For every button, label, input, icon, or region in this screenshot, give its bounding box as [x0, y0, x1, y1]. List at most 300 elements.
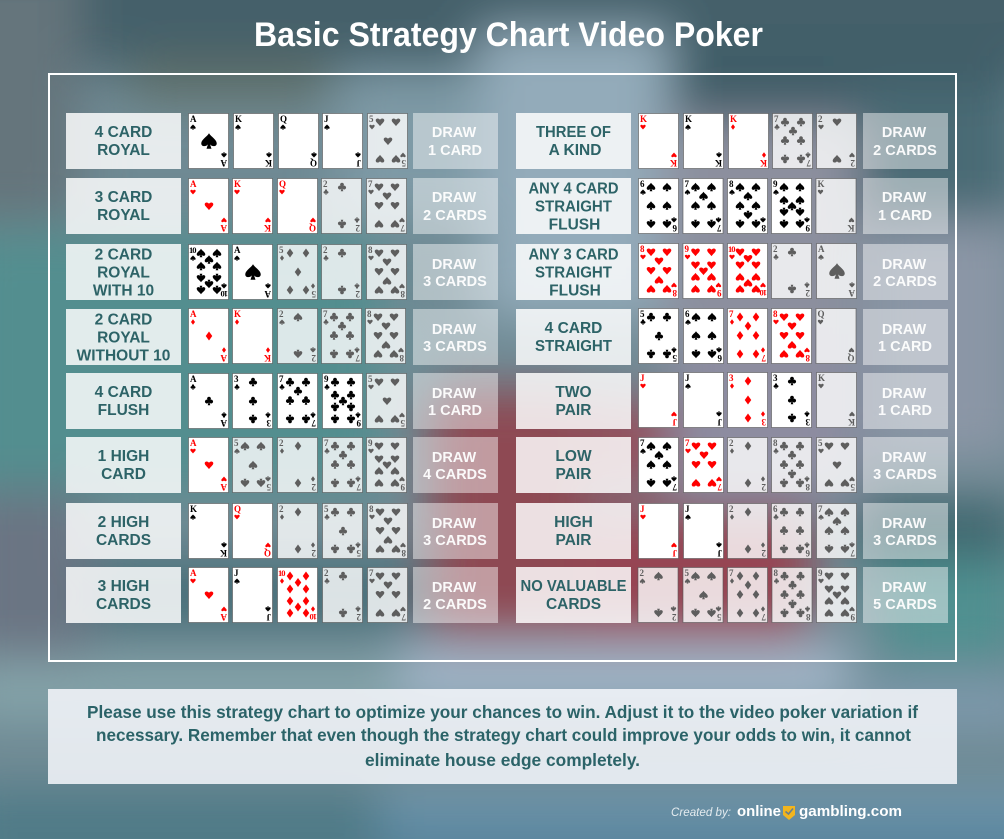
row: 4 card royal — [66, 113, 498, 169]
card: A clubs: A — [190, 374, 197, 384]
card: J spades: J — [266, 612, 271, 622]
row: 2 card royal without 10 — [66, 308, 498, 365]
row: any 3 card straight flush: STRAIGHT — [535, 264, 613, 282]
card: 5 spades faded: 5 — [684, 568, 690, 578]
row: low pair: 3 CARDS — [873, 467, 937, 483]
card: 3 diamonds — [728, 372, 768, 428]
card: 7 spades faded: 7 — [850, 548, 855, 558]
card: J hearts — [638, 372, 678, 428]
row: two pair — [516, 372, 948, 429]
card: A diamonds — [188, 308, 228, 364]
row: no valuable cards: DRAW — [882, 580, 926, 596]
card: 5 clubs faded: 5 — [324, 504, 329, 514]
card: K diamonds — [232, 308, 272, 364]
card: 2 spades faded: 2 — [311, 353, 316, 363]
card: 8 hearts: 8 — [805, 353, 810, 363]
card: 7 clubs faded: 7 — [806, 158, 811, 168]
card: 8 clubs faded: 8 — [773, 438, 778, 448]
card: A spades: A — [220, 158, 227, 168]
card: J spades: J — [717, 417, 722, 427]
card: 5 spades faded — [232, 438, 272, 492]
row: any 4 card straight flush: 1 CARD — [878, 208, 932, 224]
card: A spades: A — [264, 289, 271, 299]
row: 2 high cards: DRAW — [432, 516, 476, 532]
row: 2 card royal with 10: 3 CARDS — [423, 274, 487, 290]
card: 7 diamonds: 7 — [761, 353, 766, 363]
row: 4 card flush: FLUSH — [98, 402, 149, 419]
card: 6 spades: 6 — [717, 353, 722, 363]
card: 7 clubs faded: 7 — [356, 482, 361, 492]
card: 2 clubs faded: 2 — [323, 245, 328, 255]
card: 6 spades: 6 — [640, 179, 645, 189]
card: K hearts faded — [816, 178, 856, 234]
card: Q hearts — [232, 504, 272, 558]
card: A hearts — [188, 178, 228, 234]
card: Q hearts faded: Q — [847, 353, 854, 363]
card: 2 diamonds faded: 2 — [311, 548, 316, 558]
card: 3 clubs — [772, 372, 812, 428]
row: any 4 card straight flush: ANY 4 CARD — [528, 180, 618, 198]
card: 2 spades faded: 2 — [279, 309, 284, 319]
card: 2 diamonds faded: 2 — [761, 482, 766, 492]
card: K diamonds: K — [730, 114, 737, 124]
card: 10 spades — [188, 244, 228, 300]
card: J spades — [684, 504, 724, 558]
card: K spades — [234, 114, 274, 168]
card: K hearts faded: K — [847, 223, 854, 233]
card: 7 clubs faded — [322, 308, 362, 364]
card: 8 clubs faded: 8 — [774, 568, 778, 578]
chart frame — [49, 74, 956, 661]
card: 2 clubs faded: 2 — [355, 223, 360, 233]
card: 7 diamonds faded: 7 — [729, 568, 734, 578]
card: 8 hearts: 8 — [640, 244, 645, 254]
row: 4 card straight: 4 CARD — [545, 320, 602, 337]
card: 2 spades faded: 2 — [672, 612, 676, 622]
row: three of a kind: THREE OF — [536, 124, 611, 141]
card: 9 spades: 9 — [773, 179, 778, 189]
card: 3 clubs: 3 — [266, 418, 271, 428]
row: 2 high cards: 2 HIGH — [98, 514, 149, 531]
card: 8 hearts faded — [366, 244, 406, 300]
card: K spades: K — [265, 158, 272, 168]
card: K hearts: K — [670, 158, 677, 168]
card: 7 hearts: 7 — [717, 482, 722, 492]
row: any 4 card straight flush — [516, 178, 948, 234]
row: any 4 card straight flush: STRAIGHT — [535, 198, 613, 216]
card: 7 diamonds: 7 — [729, 309, 734, 319]
card: K spades — [188, 504, 228, 558]
card: 8 spades: 8 — [761, 223, 766, 233]
card: 7 diamonds — [728, 308, 768, 364]
card: A hearts: A — [220, 482, 227, 492]
card: A spades: A — [190, 114, 197, 124]
row: three of a kind — [516, 113, 948, 169]
note panel: necessary. Remember that even though the strategy chart could improve your odds to win, it cannot — [96, 725, 911, 745]
card: K hearts faded: K — [848, 417, 855, 427]
card: 7 spades: 7 — [716, 223, 722, 233]
card: 8 hearts faded: 8 — [399, 353, 404, 363]
card: Q hearts: Q — [309, 223, 316, 233]
title: Basic Strategy Chart Video Poker — [254, 16, 763, 54]
card: 3 clubs: 3 — [234, 374, 239, 384]
row: 2 high cards: 3 CARDS — [423, 533, 487, 549]
card: 10 diamonds: 10 — [278, 568, 285, 578]
card: K spades: K — [685, 114, 692, 124]
card: J spades: J — [234, 568, 239, 578]
card: 7 clubs faded: 7 — [323, 309, 328, 319]
card: 7 spades faded — [816, 504, 856, 558]
card: 6 spades: 6 — [672, 223, 677, 233]
card: 5 spades faded: 5 — [266, 482, 271, 492]
row: low pair: LOW — [555, 448, 592, 465]
card: 5 clubs faded — [322, 504, 362, 558]
card: 10 spades: 10 — [189, 245, 196, 255]
row: 3 high cards: 3 HIGH — [98, 578, 149, 595]
card: 9 hearts — [683, 244, 723, 298]
card: 2 spades faded — [278, 308, 318, 364]
row: 4 card royal: ROYAL — [97, 142, 150, 159]
card: 6 spades: 6 — [685, 309, 690, 319]
note panel: eliminate house edge completely. — [365, 750, 640, 770]
card: 8 hearts: 8 — [773, 309, 778, 319]
card: K hearts: K — [640, 114, 647, 124]
row: 2 card royal without 10: WITHOUT 10 — [77, 348, 170, 364]
row: 4 card straight: STRAIGHT — [535, 338, 613, 355]
card: K diamonds: K — [234, 309, 241, 319]
card: 9 hearts faded: 9 — [400, 482, 405, 492]
card: A spades faded: A — [818, 244, 825, 254]
card: 2 diamonds faded — [278, 504, 318, 558]
card: 9 hearts: 9 — [684, 244, 690, 254]
card: 8 spades — [728, 178, 768, 234]
card: 10 diamonds — [278, 568, 318, 622]
card: 2 diamonds faded: 2 — [279, 504, 284, 514]
card: 5 hearts faded: 5 — [818, 438, 823, 448]
row: no valuable cards: 5 CARDS — [873, 597, 937, 613]
row: 4 card flush: 4 CARD — [95, 384, 152, 401]
card: 8 hearts faded: 8 — [400, 289, 405, 299]
row: 1 high card — [66, 437, 498, 493]
row: 3 card royal: ROYAL — [97, 207, 150, 224]
card: 8 hearts faded — [368, 504, 408, 558]
row: 4 card straight: DRAW — [882, 322, 926, 338]
card: 5 hearts faded: 5 — [369, 114, 374, 124]
card: 7 spades — [638, 438, 678, 492]
card: 9 spades: 9 — [805, 223, 810, 233]
card: 8 clubs faded — [772, 438, 812, 492]
row: 3 card royal: 2 CARDS — [423, 208, 487, 224]
card: K hearts faded: K — [818, 373, 825, 383]
card: 9 hearts: 9 — [716, 288, 722, 298]
card: J hearts — [638, 504, 678, 558]
card: A hearts: A — [220, 612, 227, 622]
row: 4 card royal: DRAW — [432, 125, 476, 141]
row: no valuable cards: CARDS — [546, 596, 601, 613]
card: 6 clubs faded — [772, 504, 812, 558]
card: 5 diamonds faded — [278, 244, 318, 300]
card: 5 clubs: 5 — [672, 353, 677, 363]
card: 9 hearts faded: 9 — [850, 612, 855, 622]
card: 2 clubs faded: 2 — [773, 244, 778, 254]
card: 8 hearts faded: 8 — [369, 504, 374, 514]
card: J spades: J — [685, 504, 690, 514]
card: 2 hearts faded: 2 — [850, 158, 855, 168]
footer credit and logo: gambling.com — [799, 803, 902, 820]
row: 3 high cards — [66, 567, 498, 623]
note panel — [48, 689, 957, 784]
card: 3 clubs: 3 — [773, 373, 778, 383]
card: Q hearts: Q — [234, 504, 241, 514]
row: any 3 card straight flush: ANY 3 CARD — [528, 246, 618, 264]
card: 9 clubs — [322, 374, 362, 428]
card: 5 hearts faded: 5 — [368, 374, 373, 384]
row: 4 card royal: 1 CARD — [428, 143, 482, 159]
card: 6 clubs faded: 6 — [773, 504, 778, 514]
card: 5 spades faded: 5 — [234, 438, 239, 448]
row: 1 high card: 1 HIGH — [98, 448, 149, 465]
icon: shield logo — [783, 806, 795, 820]
card: J spades: J — [685, 373, 690, 383]
row: any 3 card straight flush: 2 CARDS — [873, 274, 937, 290]
card: K hearts faded: K — [818, 179, 825, 189]
card: 8 spades: 8 — [729, 179, 734, 189]
row: two pair: TWO — [555, 384, 592, 401]
row: two pair: DRAW — [882, 386, 926, 402]
row: 4 card flush: 1 CARD — [428, 403, 482, 419]
card: 9 hearts faded — [816, 568, 856, 622]
card: K spades: K — [715, 158, 722, 168]
card: 7 hearts faded: 7 — [368, 179, 373, 189]
card: 2 diamonds faded: 2 — [311, 482, 316, 492]
card: 2 clubs faded — [772, 244, 812, 298]
row: no valuable cards — [516, 567, 948, 623]
card: A hearts: A — [190, 568, 197, 578]
card: 2 hearts faded: 2 — [818, 114, 823, 124]
row: high pair: 3 CARDS — [873, 533, 937, 549]
row: any 4 card straight flush: DRAW — [882, 190, 926, 206]
card: 3 clubs: 3 — [805, 417, 810, 427]
card: 2 hearts faded — [816, 114, 856, 168]
card: A clubs: A — [220, 418, 227, 428]
card: A spades: A — [234, 245, 241, 255]
card: 7 clubs — [278, 374, 318, 428]
row: low pair — [516, 437, 948, 493]
row: no valuable cards: NO VALUABLE — [520, 578, 626, 595]
card: 9 spades — [772, 178, 812, 234]
card: 2 clubs faded — [322, 244, 362, 300]
row: 2 card royal with 10: 2 CARD — [95, 246, 152, 264]
row: any 3 card straight flush: FLUSH — [549, 282, 601, 300]
row: 2 card royal with 10: DRAW — [432, 257, 476, 273]
card: J hearts: J — [672, 417, 677, 427]
row: two pair: 1 CARD — [878, 403, 932, 419]
card: 7 hearts: 7 — [685, 438, 690, 448]
card: 5 spades faded — [683, 568, 723, 622]
card: 2 diamonds faded: 2 — [761, 548, 766, 558]
card: 7 hearts faded: 7 — [369, 568, 374, 578]
row: 4 card royal: 4 CARD — [95, 124, 152, 141]
card: 5 hearts faded: 5 — [400, 418, 405, 428]
card: J spades: J — [324, 114, 329, 124]
card: 2 clubs faded: 2 — [356, 612, 361, 622]
card: 10 hearts — [728, 244, 768, 298]
card: 2 clubs faded — [322, 178, 362, 234]
card: A hearts: A — [190, 179, 197, 189]
card: 8 hearts — [638, 244, 678, 298]
card: 10 hearts: 10 — [760, 288, 767, 298]
card: 7 clubs faded: 7 — [324, 438, 329, 448]
card: 9 hearts faded: 9 — [368, 438, 373, 448]
row: 2 card royal with 10 — [66, 244, 498, 300]
card: 3 clubs — [232, 374, 272, 428]
card: 5 hearts faded — [368, 114, 408, 168]
card: 5 clubs: 5 — [640, 309, 645, 319]
row: low pair: DRAW — [882, 450, 926, 466]
row: 2 card royal without 10: DRAW — [432, 322, 476, 338]
card: 2 diamonds faded: 2 — [279, 438, 284, 448]
card: 2 diamonds faded — [728, 438, 768, 492]
card: 7 diamonds faded: 7 — [761, 612, 766, 622]
card: 8 clubs faded: 8 — [806, 612, 810, 622]
card: K spades — [684, 114, 724, 168]
card: A clubs — [188, 374, 228, 428]
card: 5 hearts faded: 5 — [401, 158, 406, 168]
card: K spades: K — [220, 548, 227, 558]
card: A hearts: A — [190, 438, 197, 448]
row: 3 card royal — [66, 178, 498, 234]
card: 7 hearts faded: 7 — [401, 612, 406, 622]
card: 8 hearts faded: 8 — [368, 245, 373, 255]
card: 8 hearts — [772, 308, 812, 364]
panel: right column of strategy rows — [516, 113, 948, 623]
card: 3 diamonds: 3 — [761, 417, 766, 427]
row: 2 card royal without 10: ROYAL — [97, 330, 150, 346]
card: Q hearts: Q — [279, 179, 286, 189]
card: 2 diamonds faded: 2 — [729, 438, 734, 448]
card: Q hearts faded — [816, 308, 856, 364]
card: 7 hearts faded — [368, 568, 408, 622]
row: 3 high cards: DRAW — [432, 580, 476, 596]
footer credit and logo: Created by: — [671, 807, 731, 819]
card: 9 clubs: 9 — [324, 374, 329, 384]
row: low pair: PAIR — [556, 466, 591, 483]
card: J spades — [322, 114, 362, 168]
row: 2 card royal with 10: ROYAL — [97, 264, 150, 282]
row: 2 high cards: CARDS — [96, 532, 151, 549]
card: J spades: J — [717, 548, 722, 558]
card: 7 spades — [683, 178, 723, 234]
card: A hearts — [188, 568, 228, 622]
card: 7 hearts faded — [366, 178, 406, 234]
card: A diamonds: A — [190, 309, 197, 319]
row: 2 card royal without 10: 2 CARD — [95, 312, 152, 328]
row: 2 card royal with 10: WITH 10 — [93, 282, 154, 300]
card: 6 spades — [684, 308, 724, 364]
card: 2 clubs faded: 2 — [355, 289, 360, 299]
card: 2 spades faded: 2 — [640, 568, 644, 578]
row: 4 card flush: DRAW — [432, 386, 476, 402]
card: A hearts — [188, 438, 228, 492]
card: 8 hearts faded: 8 — [367, 309, 372, 319]
card: 7 spades faded: 7 — [818, 504, 823, 514]
card: 3 diamonds: 3 — [729, 373, 734, 383]
card: 7 clubs faded — [772, 114, 812, 168]
card: 10 hearts: 10 — [728, 244, 735, 254]
card: J spades — [684, 372, 724, 428]
row: 3 card royal: 3 CARD — [95, 189, 152, 206]
card: K hearts — [232, 178, 272, 234]
footer credit and logo — [671, 803, 902, 820]
card: 7 clubs: 7 — [279, 374, 284, 384]
row: two pair: PAIR — [556, 402, 591, 419]
card: 9 clubs: 9 — [356, 418, 361, 428]
card: 5 hearts faded — [816, 438, 856, 492]
card: 9 hearts faded: 9 — [818, 568, 823, 578]
card: 5 clubs — [638, 308, 678, 364]
card: Q spades: Q — [280, 114, 287, 124]
card: K spades: K — [235, 114, 242, 124]
card: A spades faded — [816, 244, 856, 298]
row: 4 card flush — [66, 373, 498, 429]
card: 5 diamonds faded: 5 — [311, 289, 316, 299]
card: J spades: J — [356, 158, 361, 168]
card: 5 clubs faded: 5 — [356, 548, 361, 558]
row: 2 card royal without 10: 3 CARDS — [423, 339, 487, 355]
card: 2 diamonds faded: 2 — [729, 504, 734, 514]
row: any 3 card straight flush: DRAW — [882, 257, 926, 273]
row: any 3 card straight flush — [516, 244, 948, 300]
row: any 4 card straight flush: FLUSH — [549, 216, 600, 234]
card: 8 hearts: 8 — [672, 288, 677, 298]
card: 8 hearts faded — [366, 308, 406, 364]
card: 7 hearts faded: 7 — [400, 223, 405, 233]
row: 3 card royal: DRAW — [432, 190, 476, 206]
row: 3 high cards: CARDS — [96, 596, 151, 613]
card: 7 spades: 7 — [640, 438, 645, 448]
row: three of a kind: DRAW — [882, 125, 926, 141]
card: K diamonds: K — [264, 353, 271, 363]
card: K hearts — [638, 114, 678, 168]
row: 1 high card: 4 CARDS — [423, 467, 487, 483]
card: 6 clubs faded: 6 — [805, 548, 810, 558]
card: 9 hearts faded — [366, 438, 406, 492]
card: J hearts: J — [672, 548, 677, 558]
note panel: Please use this strategy chart to optimize your chances to win. Adjust it to the video poker variation if — [87, 702, 918, 722]
card: 7 diamonds faded — [728, 568, 768, 622]
card: 7 clubs faded: 7 — [355, 353, 360, 363]
card: 2 spades faded — [638, 568, 678, 622]
card: 5 hearts faded — [366, 374, 406, 428]
card: Q hearts — [278, 178, 318, 234]
row: 1 high card: CARD — [101, 466, 146, 483]
card: A spades — [188, 114, 228, 168]
card: K hearts faded — [816, 372, 856, 428]
card: 2 clubs faded: 2 — [323, 179, 328, 189]
row: 3 high cards: 2 CARDS — [423, 597, 487, 613]
card: A spades faded: A — [848, 288, 855, 298]
card: A hearts: A — [220, 223, 227, 233]
card: 10 diamonds: 10 — [310, 612, 317, 622]
card: 10 spades: 10 — [221, 289, 228, 299]
card: K spades: K — [190, 504, 197, 514]
row: three of a kind: 2 CARDS — [873, 143, 937, 159]
card: J hearts: J — [640, 504, 645, 514]
card: J spades — [232, 568, 272, 622]
row: high pair — [516, 503, 948, 559]
card: A spades — [232, 244, 272, 300]
row: 4 card straight: 1 CARD — [878, 339, 932, 355]
